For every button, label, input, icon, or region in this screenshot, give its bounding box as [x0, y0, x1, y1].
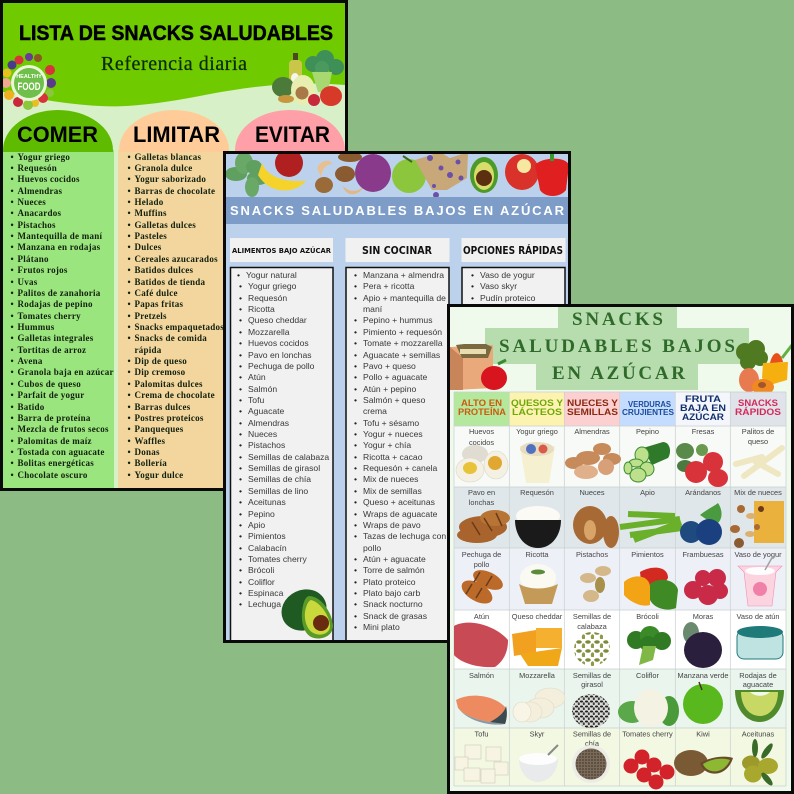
list: sin cocinar: Wraps de pavo	[363, 520, 421, 530]
icon: salmon	[456, 696, 507, 725]
table headers: SNACKS	[738, 398, 778, 408]
list: comer: Frutos rojos	[18, 265, 68, 275]
table headers	[458, 394, 781, 422]
list: alimentos bajo azúcar: Mozzarella	[248, 327, 290, 337]
icon: almonds	[565, 443, 621, 479]
list: sin cocinar: Mix de semillas	[363, 486, 422, 496]
cell labels: Arándanos	[685, 488, 721, 497]
list: comer	[10, 152, 114, 480]
list: sin cocinar: Tazas de lechuga con	[363, 531, 446, 541]
cell labels: Mozzarella	[519, 671, 556, 680]
cell labels: girasol	[581, 680, 603, 689]
list: comer: Manzana en rodajas	[18, 242, 100, 252]
list: alimentos bajo azúcar: Yogur natural	[246, 270, 297, 280]
icon: turkey slices	[457, 510, 510, 543]
icon: cheese sticks	[736, 448, 782, 476]
icon: nut mix	[730, 501, 784, 548]
list: sin cocinar: Atún + aguacate	[363, 554, 426, 564]
list: sin cocinar: Pimiento + requesón	[363, 327, 442, 337]
cell labels: Vaso de yogur	[734, 550, 782, 559]
list: alimentos bajo azúcar: Pimientos	[248, 531, 286, 541]
list: comer: Anacardos	[18, 208, 61, 218]
table headers: VERDURAS	[628, 400, 672, 409]
list: limitar: Granola dulce	[134, 163, 193, 173]
cell labels: Frambuesas	[682, 550, 724, 559]
list: comer: Huevos cocidos	[18, 174, 80, 184]
cell labels: Salmón	[469, 671, 494, 680]
icon: vegetables	[272, 50, 344, 106]
list: alimentos bajo azúcar: Pavo en lonchas	[248, 350, 312, 360]
panel: tabla de snacks	[447, 304, 794, 794]
list: limitar: rápida	[134, 345, 162, 355]
list: alimentos bajo azúcar: Queso cheddar	[248, 315, 307, 325]
table headers: ALTO EN	[461, 398, 502, 408]
title: SALUDABLES BAJOS	[499, 336, 735, 357]
list: sin cocinar: Pera + ricotta	[363, 281, 414, 291]
list: opciones rápidas: Vaso skyr	[480, 281, 517, 291]
table headers: CRUJIENTES	[622, 408, 675, 417]
icon: cauliflower	[618, 689, 679, 727]
list: sin cocinar: Snack nocturno	[363, 599, 423, 609]
heading: lista: LISTA DE SNACKS SALUDABLES	[19, 22, 333, 45]
icon: walnuts	[573, 506, 619, 548]
icon: cherry tomatoes	[624, 750, 674, 790]
table headers: FRUTA	[685, 394, 722, 404]
cell labels: Coliflor	[636, 671, 660, 680]
icon: cucumber	[624, 442, 670, 482]
list: comer: Tostada con aguacate	[18, 447, 105, 457]
icon: celery	[620, 514, 682, 540]
list: alimentos bajo azúcar: Semillas de lino	[248, 486, 308, 496]
cell labels: Requesón	[520, 488, 554, 497]
dome: limitar	[119, 110, 229, 152]
icon: cottage cheese bowl	[515, 506, 561, 548]
cell labels: Almendras	[574, 427, 610, 436]
subheading: Referencia diaria	[101, 53, 247, 75]
banner	[223, 197, 571, 224]
list: opciones rápidas	[471, 270, 536, 303]
list: alimentos bajo azúcar: Pepino	[248, 509, 275, 519]
icon: raspberries	[684, 569, 728, 605]
table headers: QUESOS Y	[511, 398, 563, 408]
cell labels: queso	[748, 437, 768, 446]
list: alimentos bajo azúcar: Salmón	[248, 384, 277, 394]
list: comer: Uvas	[18, 277, 38, 287]
cell labels: chía	[585, 739, 600, 748]
list: alimentos bajo azúcar: Requesón	[248, 293, 287, 303]
list: sin cocinar: crema	[363, 406, 387, 416]
list: sin cocinar: Plato bajo carb	[363, 588, 420, 598]
list: sin cocinar: Manzana + almendra	[363, 270, 444, 280]
list: limitar: Galletas blancas	[134, 152, 201, 162]
cell labels: Aceitunas	[742, 730, 775, 738]
dome: evitar	[235, 110, 345, 152]
cell labels: Pechuga de	[462, 550, 501, 559]
table grid background	[454, 392, 786, 786]
list: alimentos bajo azúcar: Semillas de girasol	[248, 463, 320, 473]
list: sin cocinar: Tomate + mozzarella	[363, 338, 443, 348]
list: limitar: Batidos dulces	[134, 265, 193, 275]
cell labels: Pimientos	[631, 550, 664, 559]
cell labels: Kiwi	[696, 730, 710, 738]
list: comer: Batido	[18, 402, 45, 412]
list: alimentos bajo azúcar: Aguacate	[248, 406, 284, 416]
icon: kiwi	[674, 750, 733, 776]
list: alimentos bajo azúcar: Semillas de calabaza	[248, 452, 329, 462]
cell labels: Semillas de	[573, 730, 611, 738]
cell labels: Vaso de atún	[736, 612, 780, 621]
list: sin cocinar: Pollo + aguacate	[363, 372, 427, 382]
cell labels: Pistachos	[576, 550, 608, 559]
list: alimentos bajo azúcar: Pistachos	[248, 440, 285, 450]
list: limitar: Barras de chocolate	[134, 186, 215, 196]
table headers: RÁPIDOS	[735, 407, 781, 417]
dome: limitar: LIMITAR	[133, 122, 220, 147]
panel art: food strip, banner and column boxes	[226, 154, 568, 640]
list: comer: Yogur griego	[18, 152, 70, 162]
cell labels: lonchas	[469, 498, 495, 507]
icon: tofu	[455, 745, 508, 783]
table headers: NUECES Y	[567, 398, 618, 408]
list: comer: Hummus	[18, 322, 55, 332]
icon: tuna	[454, 623, 508, 667]
column head: alimentos: ALIMENTOS BAJO AZÚCAR	[232, 246, 331, 255]
list: sin cocinar: Snack de grasas	[363, 611, 427, 621]
icon: tuna can	[737, 626, 783, 659]
list: alimentos bajo azúcar: Calabacín	[248, 543, 287, 553]
icon: mozzarella	[513, 688, 565, 722]
cell labels: aguacate	[743, 680, 773, 689]
list: sin cocinar: Requesón + canela	[363, 463, 437, 473]
cell labels: Skyr	[530, 730, 545, 738]
list: sin cocinar: Tofu + sésamo	[363, 418, 419, 428]
icon: avocado slices	[735, 690, 784, 722]
cell labels: pollo	[474, 560, 489, 569]
dome: comer: COMER	[17, 122, 98, 147]
cell labels: Brócoli	[636, 612, 659, 621]
list: limitar: Cereales azucarados	[134, 254, 218, 264]
list: comer: Palitos de zanahoria	[18, 288, 100, 298]
cell labels	[462, 427, 782, 748]
list: sin cocinar: Aguacate + semillas	[363, 350, 440, 360]
title: SNACKS	[572, 309, 663, 330]
list: comer: Parfait de yogur	[18, 390, 84, 400]
logo: healthy food	[1, 53, 56, 110]
list: comer: Tortitas de arroz	[18, 345, 86, 355]
column head: alimentos	[230, 238, 333, 262]
list: alimentos bajo azúcar: Apio	[248, 520, 265, 530]
icon: blackberries	[683, 622, 722, 668]
cell labels: Palitos de	[742, 427, 774, 436]
dome: evitar: EVITAR	[255, 122, 330, 147]
cell labels: Apio	[640, 488, 655, 497]
cell labels: cocidos	[469, 438, 494, 447]
list: alimentos bajo azúcar: Espinaca	[248, 588, 283, 598]
list: limitar: Batidos de tienda	[134, 277, 205, 287]
list: comer: Barra de proteína	[18, 413, 91, 423]
list: sin cocinar: Wraps de aguacate	[363, 509, 437, 519]
list: comer: Bolitas energéticas	[18, 458, 94, 468]
icon: boiled eggs	[456, 445, 508, 482]
cell labels: Semillas de	[573, 612, 611, 621]
icon: pistachios	[580, 566, 611, 602]
list: sin cocinar: Pavo + queso	[363, 361, 416, 371]
list: limitar: Papas fritas	[134, 299, 183, 309]
list: limitar: Muffins	[134, 208, 167, 218]
list: comer: Palomitas de maíz	[18, 436, 92, 446]
icon: bell peppers	[624, 568, 678, 610]
icon: ricotta basket	[519, 564, 558, 604]
list: comer: Avena	[18, 356, 43, 366]
cell labels: Yogur griego	[516, 427, 558, 436]
table headers: AZÚCAR	[682, 411, 725, 422]
list: alimentos bajo azúcar: Yogur griego	[248, 281, 296, 291]
icon: cheddar	[512, 628, 562, 666]
icon: pumpkin seeds	[574, 632, 610, 666]
icon: yogurt cup	[738, 556, 782, 606]
cell labels: Semillas de	[573, 671, 611, 680]
list: comer: Almendras	[18, 186, 62, 196]
list: limitar: Helado	[134, 197, 164, 207]
list: alimentos bajo azúcar: Coliflor	[248, 577, 275, 587]
list: limitar: Panqueques	[134, 424, 184, 434]
column head: sin cocinar	[346, 238, 450, 262]
list: limitar: Dip cremoso	[134, 367, 185, 377]
icon: avocado	[282, 589, 333, 638]
cell labels: Pepino	[636, 427, 659, 436]
list: limitar: Café dulce	[134, 288, 178, 298]
list: limitar: Palomitas dulces	[134, 379, 203, 389]
food strip	[225, 149, 569, 198]
list: comer: Pistachos	[18, 220, 56, 230]
list: sin cocinar: Yogur + nueces	[363, 429, 423, 439]
list: alimentos bajo azúcar: Almendras	[248, 418, 289, 428]
dome: comer	[3, 110, 113, 152]
list: limitar: Yogur dulce	[134, 470, 183, 480]
list: limitar: Crema de chocolate	[134, 390, 215, 400]
list: alimentos bajo azúcar: Tofu	[248, 395, 264, 405]
list: sin cocinar: Torre de salmón	[363, 565, 425, 575]
logo: healthy food: FOOD	[18, 81, 41, 93]
list: sin cocinar: pollo	[363, 543, 381, 553]
list: sin cocinar: Plato proteico	[363, 577, 416, 587]
list: alimentos bajo azúcar: Semillas de chía	[248, 474, 311, 484]
list: limitar	[128, 152, 224, 480]
icon: yogurt	[520, 442, 555, 483]
list: limitar: Postres proteicos	[134, 413, 204, 423]
cell labels: Tofu	[475, 730, 488, 738]
cell labels: Atún	[474, 612, 489, 621]
list: alimentos bajo azúcar: Brócoli	[248, 565, 274, 575]
cell labels: Queso cheddar	[512, 612, 563, 621]
list: limitar: Yogur saborizado	[134, 174, 206, 184]
icon: green apple	[683, 682, 723, 724]
list: alimentos bajo azúcar: Tomates cherry	[248, 554, 307, 564]
list: comer: Mezcla de frutos secos	[18, 424, 109, 434]
cell labels: Rodajas de	[739, 671, 777, 680]
icon: skyr bowl	[519, 745, 558, 782]
list: alimentos bajo azúcar: Atún	[248, 372, 266, 382]
list: limitar: Barras dulces	[134, 402, 190, 412]
list: limitar: Galletas dulces	[134, 220, 196, 230]
list: comer: Requesón	[18, 163, 57, 173]
column head: opciones	[462, 238, 566, 262]
cell labels: calabaza	[577, 622, 608, 631]
list: opciones rápidas: Vaso de yogur	[480, 270, 535, 280]
icon: broccoli	[627, 626, 671, 665]
icon: vegetables	[736, 340, 792, 395]
cell labels: Nueces	[579, 488, 605, 497]
icon: strawberries	[676, 443, 728, 487]
logo: healthy food: HEALTHY	[16, 74, 42, 80]
table headers: SEMILLAS	[567, 407, 618, 417]
icon: blueberries	[680, 503, 722, 545]
panel: lista de snacks saludables	[0, 0, 348, 491]
table headers: PROTEÍNA	[458, 407, 507, 417]
list: limitar: Snacks empaquetados	[134, 322, 224, 332]
list: alimentos bajo azúcar: Ricotta	[248, 304, 275, 314]
cell labels: Fresas	[692, 427, 715, 436]
table headers: LÁCTEOS	[512, 407, 562, 417]
list: comer: Plátano	[18, 254, 49, 264]
list: comer: Nueces	[18, 197, 46, 207]
list: comer: Chocolate oscuro	[18, 470, 88, 480]
list: alimentos bajo azúcar: Huevos cocidos	[248, 338, 309, 348]
list: limitar: Dip de queso	[134, 356, 187, 366]
list: sin cocinar: Pepino + hummus	[363, 315, 433, 325]
cell labels: Moras	[693, 612, 714, 621]
list: comer: Cubos de queso	[18, 379, 81, 389]
cell labels: Mix de nueces	[734, 488, 782, 497]
list: limitar: Snacks de comida	[134, 333, 207, 343]
cell labels: Tomates cherry	[622, 730, 673, 738]
list: limitar: Bollería	[134, 458, 167, 468]
list: limitar: Donas	[134, 447, 160, 457]
list: comer: Rodajas de pepino	[18, 299, 93, 309]
list: alimentos bajo azúcar: Nueces	[248, 429, 277, 439]
panel art: header, domes and columns	[3, 3, 345, 488]
list: sin cocinar: Mini plato	[363, 622, 400, 632]
list: alimentos bajo azúcar: Aceitunas	[248, 497, 286, 507]
cell labels: Huevos	[469, 427, 494, 436]
list: comer: Granola baja en azúcar	[18, 367, 114, 377]
list: sin cocinar: Mix de nueces	[363, 474, 418, 484]
list: sin cocinar: Atún + pepino	[363, 384, 416, 394]
title	[485, 304, 749, 390]
icon: sunflower seeds	[572, 694, 610, 728]
icon: lunch bag and apple	[450, 344, 507, 390]
icon: olives	[742, 739, 778, 787]
list: sin cocinar: Apio + mantequilla de	[363, 293, 446, 303]
list: comer: Mantequilla de maní	[18, 231, 102, 241]
title: EN AZÚCAR	[552, 362, 685, 384]
list: sin cocinar: Ricotta + cacao	[363, 452, 422, 462]
icon: chia bowl	[572, 745, 610, 783]
list: limitar: Pasteles	[134, 231, 167, 241]
list: limitar: Dulces	[134, 242, 162, 252]
list: sin cocinar: Yogur + chía	[363, 440, 411, 450]
list: sin cocinar: maní	[363, 304, 382, 314]
list: sin cocinar: Queso + aceitunas	[363, 497, 435, 507]
list: alimentos bajo azúcar	[237, 270, 330, 609]
list: limitar: Waffles	[134, 436, 165, 446]
icon: chicken breast	[458, 566, 506, 608]
cell labels: Pavo en	[468, 488, 495, 497]
panel: snacks saludables bajos en azúcar	[223, 151, 571, 643]
list: sin cocinar: Salmón + queso	[363, 395, 425, 405]
list: alimentos bajo azúcar: Lechuga	[248, 599, 281, 609]
cell labels: Manzana verde	[678, 671, 728, 680]
table headers: BAJA EN	[680, 403, 726, 413]
list: limitar: Pretzels	[134, 311, 167, 321]
list: sin cocinar	[354, 270, 446, 632]
list: comer: Tomates cherry	[18, 311, 81, 321]
list: opciones rápidas: Pudín proteico	[480, 293, 535, 303]
banner: SNACKS SALUDABLES BAJOS EN AZÚCAR	[230, 203, 565, 218]
list: comer: Galletas integrales	[18, 333, 94, 343]
column head: sin cocinar: SIN COCINAR	[362, 245, 432, 257]
cell labels: Ricotta	[525, 550, 549, 559]
list: alimentos bajo azúcar: Pechuga de pollo	[248, 361, 314, 371]
